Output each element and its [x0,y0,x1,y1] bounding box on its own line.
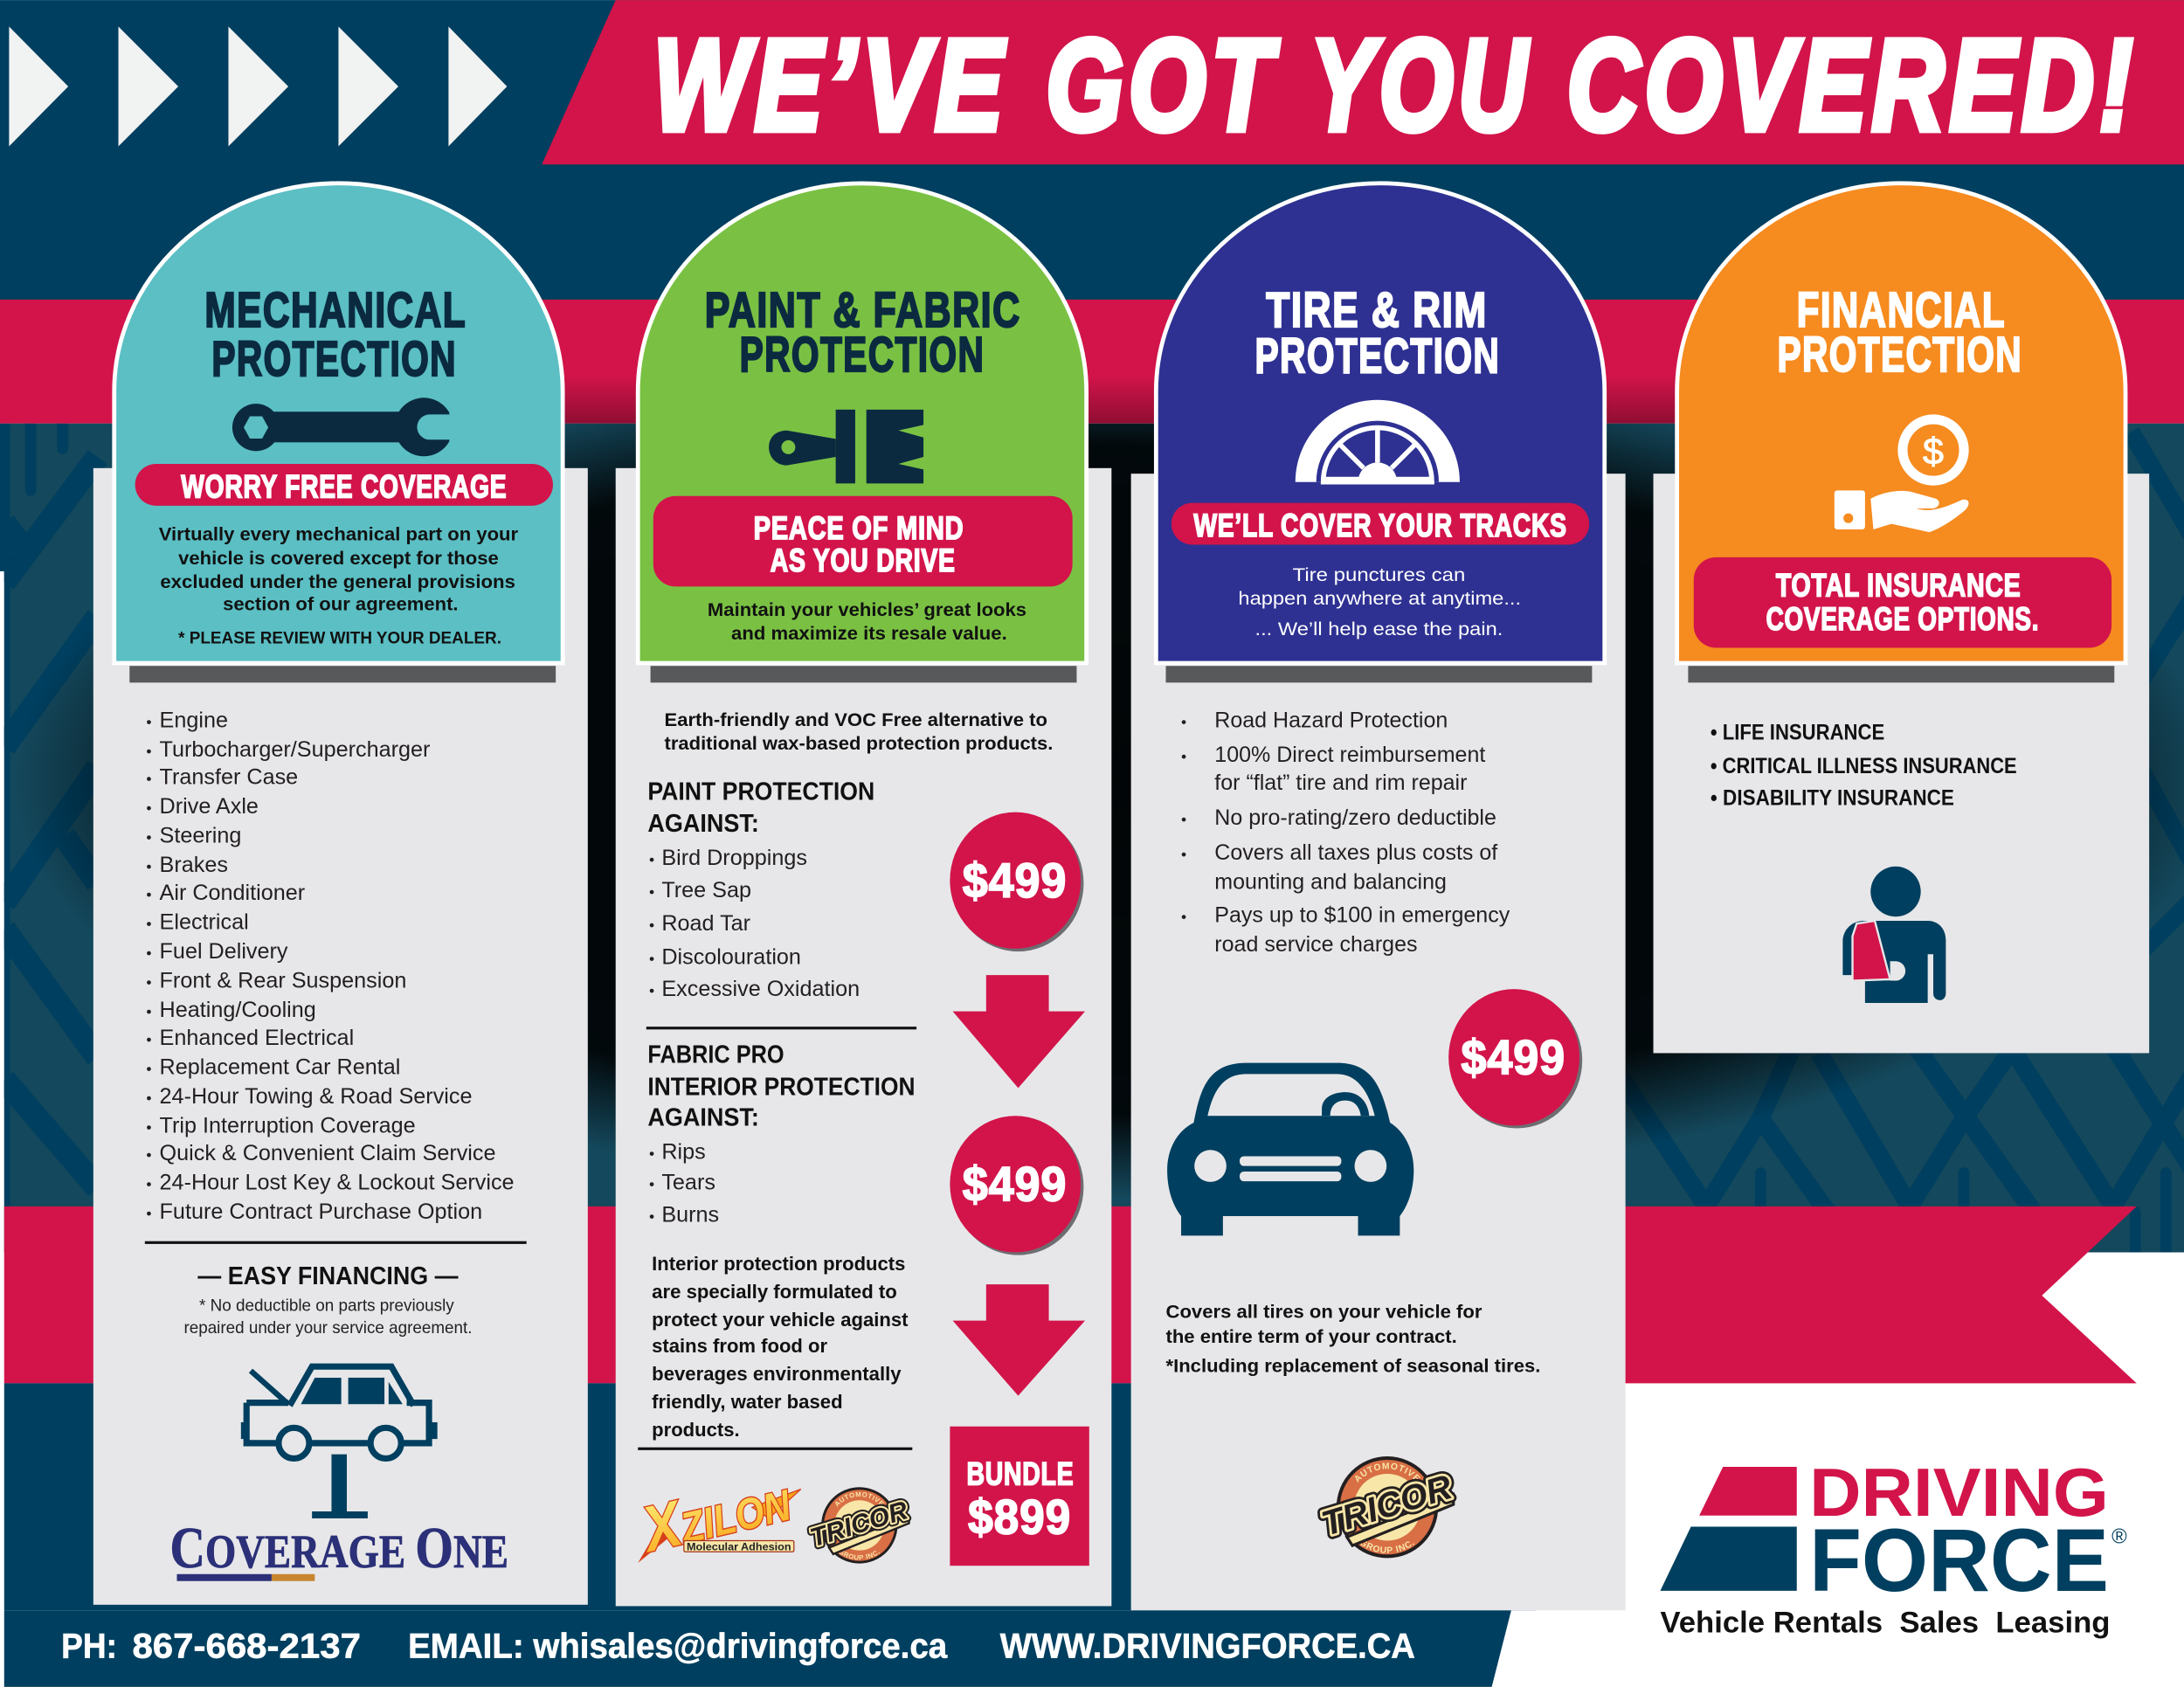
list: mechanical coverage: Brakes [160,853,228,877]
list: paint protection: Road Tar [661,911,750,936]
text: interior protection paragraph [652,1253,909,1441]
logo: tricor large: TRICOR [1317,1468,1456,1544]
header banner [542,0,2184,164]
price: bundle $899: $899 [968,1490,1071,1545]
text: earth-friendly intro: Earth-friendly and VOC Free alternative to [665,709,1047,730]
text: interior protection paragraph: protect your vehicle against [652,1309,909,1331]
icon: car front [1167,1063,1413,1235]
heading: financial protection: PROTECTION [1777,327,2022,382]
list: fabric protection: • [649,1145,654,1163]
phone: PH: [61,1627,117,1665]
list: paint protection [647,778,874,1001]
list: tire coverage: Covers all taxes plus costs of [1214,840,1497,865]
list: mechanical coverage: • [146,974,152,992]
text: easy financing [183,1262,472,1338]
logo: tricor small: GROUP INC. [839,1551,880,1560]
list: mechanical coverage: Steering [160,824,241,848]
text: interior protection paragraph: stains from food or [652,1335,827,1357]
list: mechanical coverage: • [146,771,152,788]
icon: paint brush [769,410,923,483]
text: earth-friendly intro: traditional wax-based protection products. [665,733,1053,754]
list: mechanical coverage: • [146,1031,152,1048]
list: paint protection: PAINT PROTECTION [647,778,874,805]
heading: paint and fabric protection: PROTECTION [740,327,985,382]
list: paint protection: • [649,950,654,967]
list: mechanical coverage: • [146,1089,152,1107]
text: mechanical description [159,524,519,648]
list: tire coverage: 100% Direct reimbursement [1214,743,1485,767]
list: mechanical coverage: Fuel Delivery [160,939,288,964]
logo: driving force: DRIVING [1809,1454,2109,1531]
list: fabric protection: Burns [661,1202,719,1227]
callout: total insurance: TOTAL INSURANCE [1776,567,2021,603]
callout: worry free coverage [135,464,553,506]
callout: peace of mind [653,496,1073,586]
list: mechanical coverage: Future Contract Purchase Option [160,1200,482,1224]
list: mechanical coverage: • [146,829,152,847]
text: paint description: Maintain your vehicles’ great looks [708,599,1026,620]
arrow: paint to fabric [953,975,1085,1088]
list: mechanical coverage: • [146,1205,152,1222]
callout: total insurance [1694,557,2111,647]
list: tire coverage: No pro-rating/zero deductible [1214,805,1496,830]
title: YOU [1310,13,1532,157]
list: tire coverage: Pays up to $100 in emergency [1214,903,1510,928]
list: paint protection: • [649,916,654,934]
text: tire coverage note [1166,1301,1540,1377]
list: fabric protection: Tears [661,1171,715,1195]
list: mechanical coverage: Transfer Case [160,765,298,790]
title: WE’VE [653,13,1008,157]
list: mechanical coverage: Air Conditioner [160,881,305,905]
price: tire $499 [1448,989,1582,1129]
list: fabric protection: Rips [661,1140,706,1165]
list: mechanical coverage: Heating/Cooling [160,998,316,1022]
list: tire coverage: road service charges [1214,932,1418,957]
list: mechanical coverage [146,708,515,1224]
logo: tricor large: AUTOMOTIVE [1355,1462,1420,1483]
list: tire coverage: • [1181,909,1186,926]
logo: driving force: FORCE [1809,1511,2109,1610]
title: GOT [1046,13,1279,157]
text: mechanical description: excluded under the general provisions [160,571,515,592]
phone: 867-668-2137 [132,1627,361,1665]
text: tire description: ... We’ll help ease the pain. [1255,619,1503,640]
logo: coverage one: COVERAGE ONE [170,1516,508,1580]
logo: tricor small: TRICOR [807,1496,912,1552]
icon: coin in hand [1835,419,1969,532]
heading: tire and rim protection: PROTECTION [1255,328,1500,384]
list: mechanical coverage: • [146,916,152,933]
list: fabric protection: • [649,1207,654,1225]
list: tire coverage: Road Hazard Protection [1214,708,1448,732]
list: paint protection: Excessive Oxidation [661,977,860,1001]
list: mechanical coverage: Trip Interruption Coverage [160,1113,416,1137]
list: mechanical coverage: Engine [160,708,228,732]
list: mechanical coverage: Drive Axle [160,794,259,819]
list: mechanical coverage: Replacement Car Rental [160,1054,400,1079]
price: fabric $499 [950,1116,1083,1255]
header arrows [9,26,507,147]
tagline: Vehicle Rentals Sales Leasing [1661,1607,2110,1640]
footer contact bar [4,1610,1511,1687]
heading: paint and fabric protection: PAINT & FABRIC [705,282,1021,337]
logo: xzilon: XZILON [633,1462,797,1566]
list: mechanical coverage: • [146,743,152,760]
text: interior protection paragraph: friendly, water based [652,1391,843,1413]
text: interior protection paragraph: Interior protection products [652,1253,905,1275]
text: tire coverage note: *Including replacement of seasonal tires. [1166,1356,1540,1377]
list: mechanical coverage: • [146,1003,152,1020]
panel: mechanical protection [93,183,588,1605]
price: fabric $499: $499 [963,1156,1067,1211]
text: mechanical description: * PLEASE REVIEW WITH YOUR DEALER. [178,630,501,648]
list: mechanical coverage: • [146,1118,152,1136]
list: paint protection: • [649,851,654,868]
text: interior protection paragraph: products. [652,1419,740,1441]
panel: tire and rim protection [1130,181,1626,1611]
list: tire coverage: for “flat” tire and rim repair [1214,771,1467,795]
heading: financial protection: FINANCIAL [1797,282,2006,337]
list: tire coverage: • [1181,846,1186,863]
list: fabric protection: INTERIOR PROTECTION [647,1073,916,1101]
heading: tire and rim protection: TIRE & RIM [1266,282,1488,337]
list: mechanical coverage: Turbocharger/Supercharger [160,737,430,762]
heading: paint and fabric protection [705,282,1021,382]
price: bundle $899 [950,1427,1089,1566]
list: fabric protection: • [649,1176,654,1193]
text: interior protection paragraph: beverages environmentally [652,1363,902,1385]
list: mechanical coverage: Quick & Convenient Claim Service [160,1141,496,1165]
arch: mechanical [114,183,563,663]
logo: tricor small: TRICOR [807,1496,912,1552]
list: mechanical coverage: • [146,1060,152,1077]
callout: worry free coverage: WORRY FREE COVERAGE [181,468,507,504]
text: tire description: Tire punctures can [1293,564,1465,585]
list: paint protection: Tree Sap [661,878,751,902]
lower navy field [4,1383,1537,1610]
heading: mechanical protection: PROTECTION [211,331,457,386]
heading: tire and rim protection [1255,282,1500,384]
list: mechanical coverage: 24-Hour Towing & Road Service [160,1084,473,1109]
list: mechanical coverage: • [146,713,152,730]
arrow: fabric to bundle [953,1284,1085,1396]
list: mechanical coverage: • [146,1176,152,1193]
list: paint protection: • [649,883,654,901]
text: tire coverage note: the entire term of your contract. [1166,1326,1457,1347]
price: bundle $899: BUNDLE [967,1456,1074,1492]
list: mechanical coverage: Electrical [160,910,249,935]
logo: xzilon: Molecular Adhesion [687,1541,791,1553]
text: mechanical description: vehicle is covered except for those [178,548,499,569]
list: mechanical coverage: • [146,944,152,962]
price: paint $499: $499 [963,853,1067,908]
list: mechanical coverage: • [146,858,152,875]
list: insurance options [1711,722,2017,811]
list: tire coverage: • [1181,713,1186,730]
text: mechanical description: section of our agreement. [223,593,459,614]
list: fabric protection [647,1041,916,1227]
callout: we'll cover your tracks [1171,503,1589,545]
arch: financial [1677,183,2125,663]
text: easy financing: — EASY FINANCING — [197,1262,459,1290]
list: insurance options: • DISABILITY INSURANCE [1711,787,1954,811]
list: mechanical coverage: • [146,1146,152,1164]
background [0,0,2184,1253]
logo: driving force [1661,1454,2127,1640]
list: mechanical coverage: 24-Hour Lost Key & Lockout Service [160,1171,515,1195]
list: fabric protection: AGAINST: [647,1103,759,1131]
red ribbon [4,1206,2137,1383]
callout: peace of mind: PEACE OF MIND [754,510,964,546]
list: mechanical coverage: • [146,799,152,817]
text: paint description: and maximize its resale value. [731,623,1007,644]
list: fabric protection: FABRIC PRO [647,1041,784,1069]
website: WWW.DRIVINGFORCE.CA [1000,1627,1415,1665]
panel: financial protection [1654,183,2149,1053]
heading: mechanical protection [204,282,467,386]
list: paint protection: • [649,982,654,999]
list: mechanical coverage: • [146,886,152,903]
panel: paint and fabric protection [615,182,1111,1606]
icon: wrench [232,397,460,460]
arch: paint and fabric [638,183,1087,663]
text: easy financing: repaired under your service agreement. [183,1319,472,1338]
logo: tricor large: TRICOR [1317,1468,1456,1544]
price: tire $499: $499 [1462,1029,1565,1084]
list: mechanical coverage: Front & Rear Suspension [160,969,406,993]
heading: financial protection [1777,282,2022,382]
text: tire coverage note: Covers all tires on your vehicle for [1166,1301,1482,1322]
list: paint protection: AGAINST: [647,810,759,838]
heading: mechanical protection: MECHANICAL [204,282,467,337]
list: tire coverage [1181,708,1510,957]
list: mechanical coverage: Enhanced Electrical [160,1026,354,1050]
icon: coin in hand: $ [1923,431,1944,473]
text: tire description: happen anywhere at anytime... [1238,588,1521,609]
text: interior protection paragraph: are specially formulated to [652,1281,897,1303]
callout: peace of mind: AS YOU DRIVE [771,543,956,578]
list: paint protection: Bird Droppings [661,846,807,870]
text: paint description [708,599,1026,644]
email: EMAIL: whisales@drivingforce.ca [408,1627,948,1665]
logo: driving force: ® [2111,1525,2127,1549]
list: insurance options: • CRITICAL ILLNESS INSURANCE [1711,755,2017,778]
text: tire description [1238,564,1521,640]
logo: tricor small: AUTOMOTIVE [835,1492,884,1507]
list: tire coverage: • [1181,748,1186,765]
logo: tricor large: GROUP INC. [1360,1541,1414,1553]
callout: we'll cover your tracks: WE’LL COVER YOUR TRACKS [1193,508,1567,543]
list: tire coverage: mounting and balancing [1214,869,1447,894]
icon: injured person [1842,867,1946,1003]
icon: car on lift [241,1366,438,1518]
price: paint $499 [950,812,1083,951]
text: earth-friendly intro [665,709,1053,754]
list: insurance options: • LIFE INSURANCE [1711,722,1884,745]
list: tire coverage: • [1181,811,1186,828]
arch: tire and rim [1156,183,1605,663]
icon: tire [1296,400,1460,482]
callout: total insurance: COVERAGE OPTIONS. [1766,601,2039,637]
text: easy financing: * No deductible on parts previously [199,1296,454,1315]
list: paint protection: Discolouration [661,944,801,969]
text: mechanical description: Virtually every mechanical part on your [159,524,519,545]
